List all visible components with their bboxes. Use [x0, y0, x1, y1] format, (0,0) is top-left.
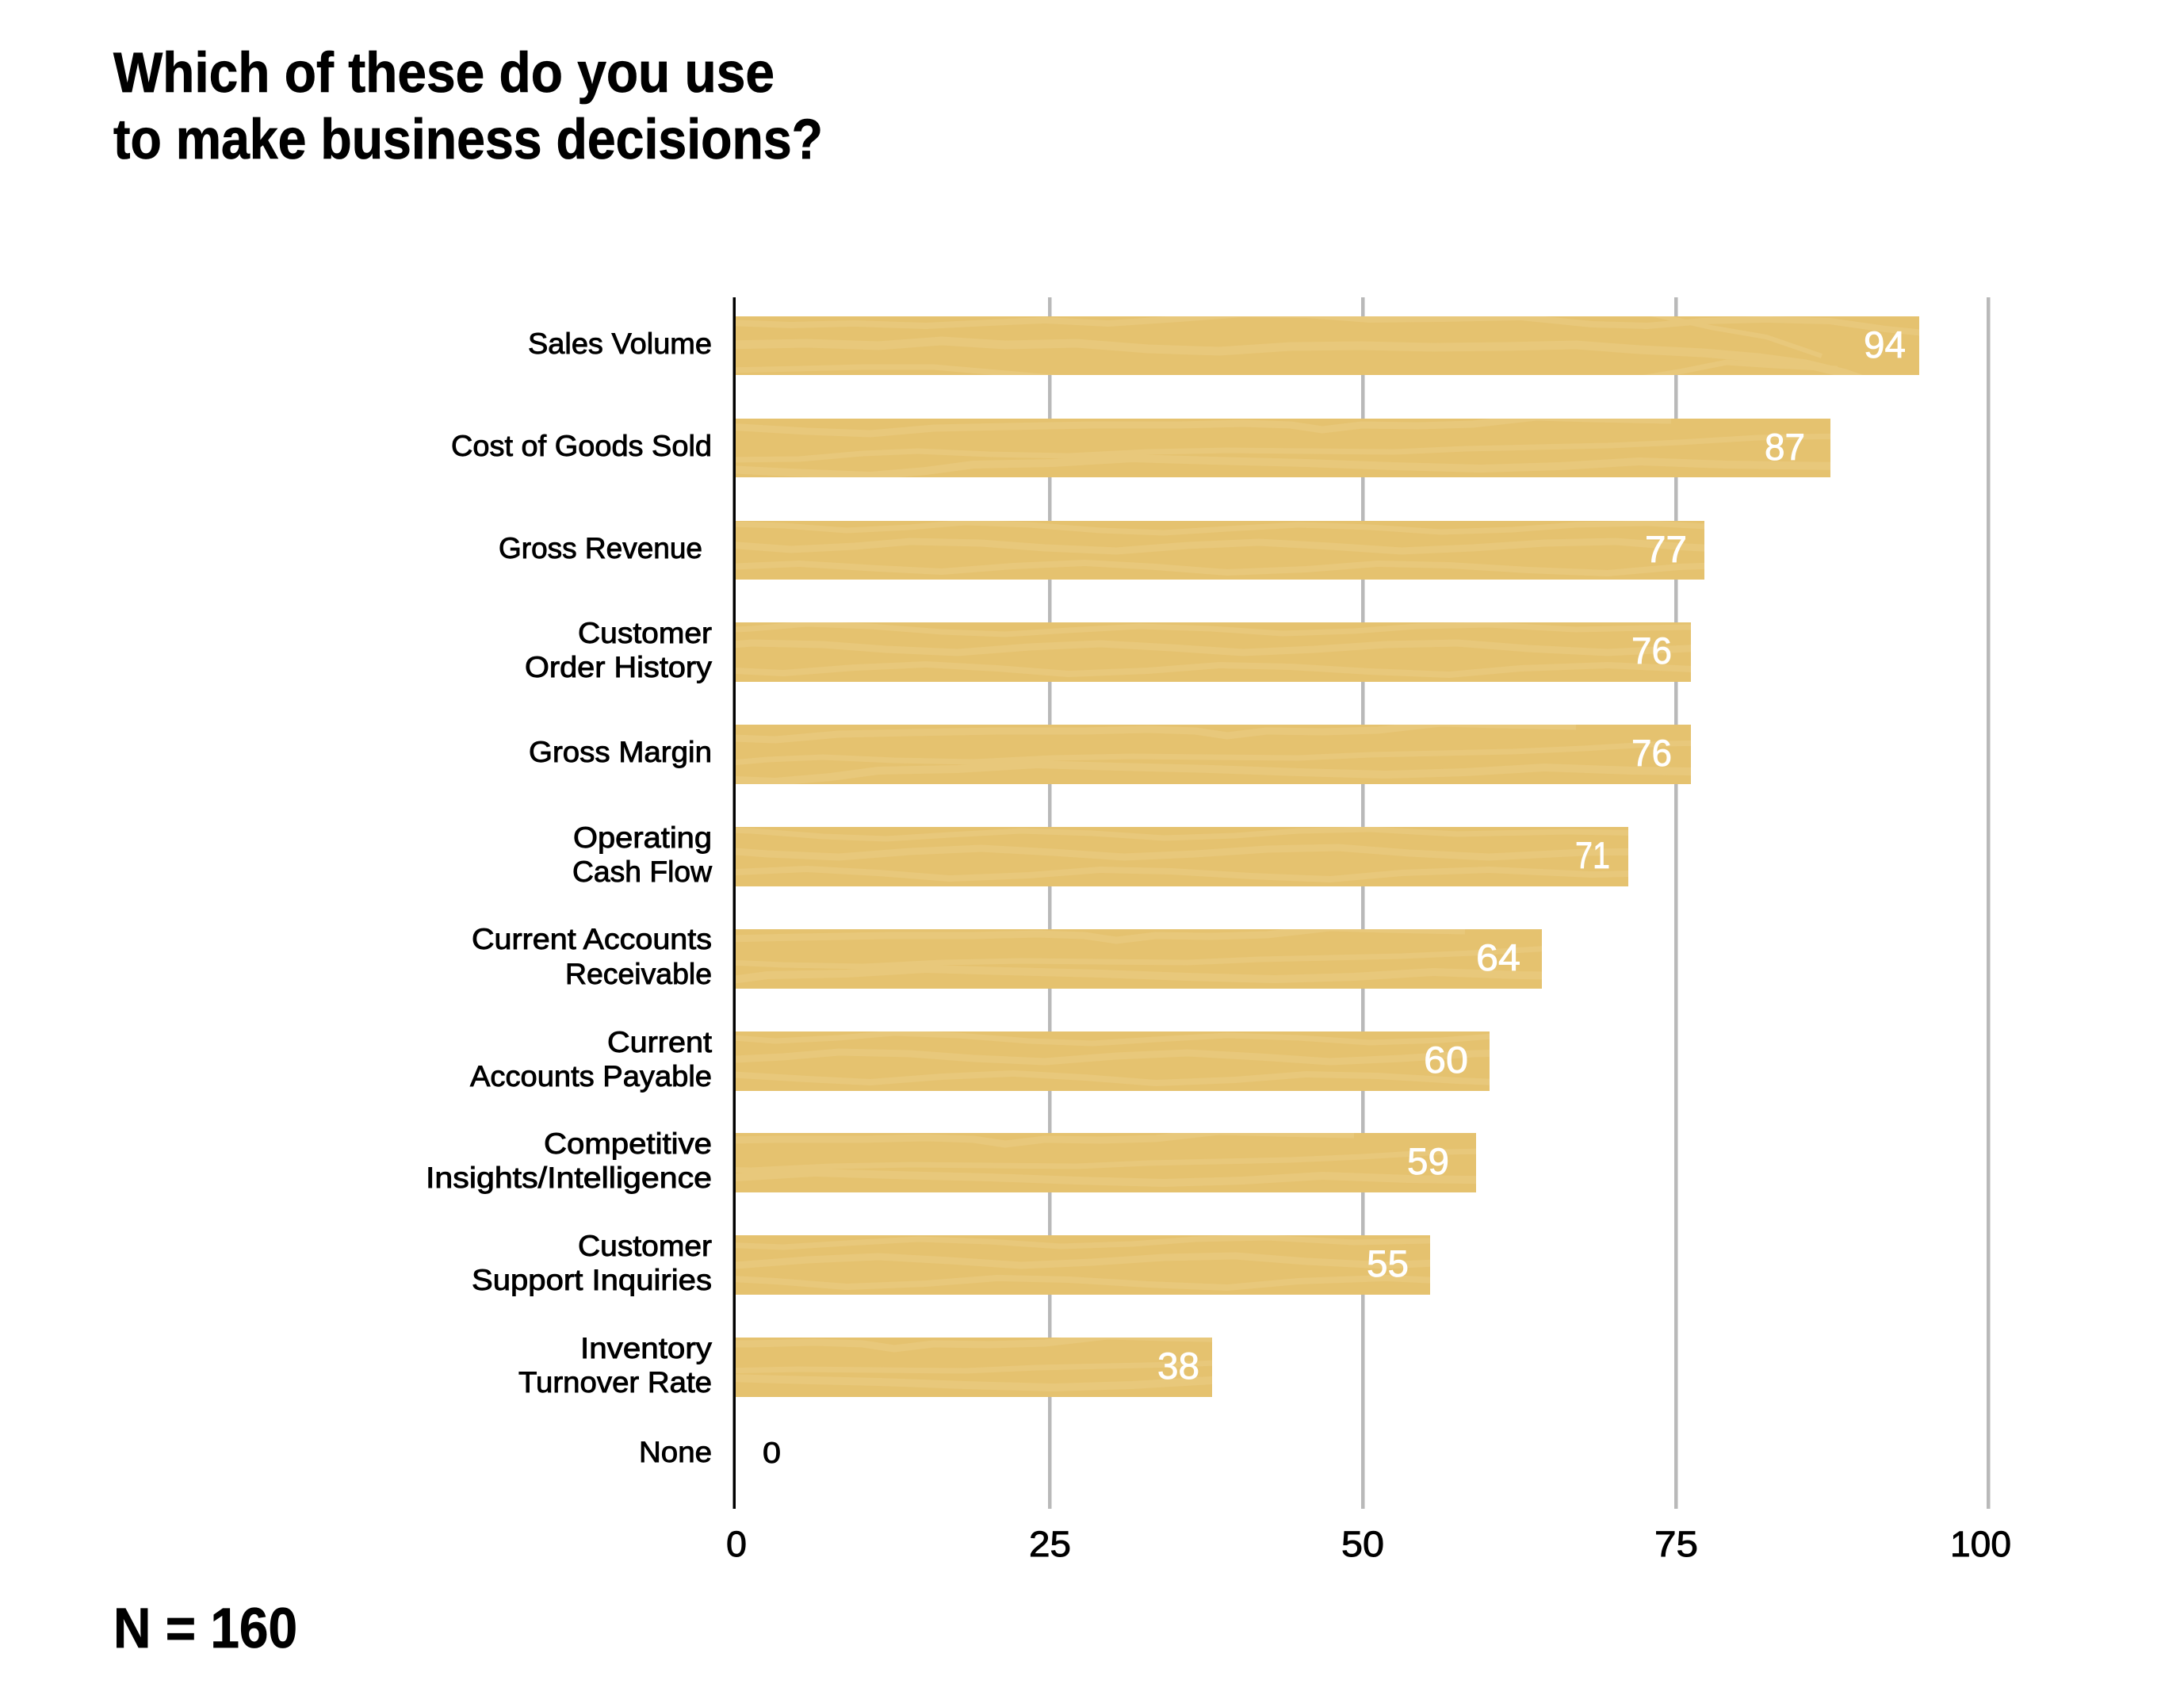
bar: Sales Volume 94: 94 [1864, 323, 1906, 366]
category labels [426, 327, 713, 1468]
category labels: Inventory [580, 1332, 713, 1364]
bar: Gross Revenue 77: 77 [1645, 528, 1687, 570]
category labels: Customer [578, 1230, 712, 1262]
category labels: Insights/Intelligence [426, 1162, 712, 1194]
bar: Gross Margin 76: 76 [1631, 732, 1672, 774]
category labels: Order History [525, 651, 713, 683]
title: to make business decisions? [113, 109, 823, 171]
bar: Sales Volume 94 [728, 313, 2020, 388]
category labels: Gross Margin [529, 736, 712, 768]
title: Which of these do you use [113, 42, 775, 105]
value: None 0: 0 [763, 1437, 781, 1469]
bar: Customer Order History 76: 76 [1631, 630, 1672, 672]
gridlines [1048, 297, 1990, 1509]
bar: Inventory Turnover Rate 38 [300, 1336, 1592, 1397]
bar: Competitive Insights/Intelligence 59: 59 [1407, 1140, 1449, 1182]
x axis tick labels: 100 [1950, 1524, 2011, 1564]
bar: Current Accounts Receivable 64: 64 [1476, 936, 1520, 978]
x axis tick labels: 0 [726, 1524, 747, 1564]
category labels: Cash Flow [572, 855, 712, 888]
x axis tick labels: 50 [1341, 1524, 1384, 1564]
y axis line [732, 297, 736, 1509]
title [113, 42, 823, 171]
category labels: Sales Volume [528, 327, 712, 360]
category labels: None [639, 1436, 712, 1468]
bar: Operating Cash Flow 71 [450, 827, 1742, 886]
category labels: Receivable [565, 958, 712, 990]
bar chart [300, 313, 2020, 1469]
bar: Cost of Goods Sold 87 [728, 417, 2020, 477]
bar: Cost of Goods Sold 87: 87 [1765, 426, 1805, 468]
category labels: Cost of Goods Sold [451, 430, 712, 462]
category labels: Accounts Payable [470, 1060, 712, 1093]
bar: Current Accounts Payable 60: 60 [1424, 1039, 1468, 1081]
bar: Gross Revenue 77 [728, 521, 2020, 580]
bar: Inventory Turnover Rate 38: 38 [1157, 1345, 1199, 1387]
bar: Competitive Insights/Intelligence 59 [411, 1131, 1703, 1192]
bar: Gross Margin 76 [633, 723, 1925, 784]
x axis tick labels: 25 [1029, 1524, 1071, 1564]
bar: Customer Support Inquiries 55: 55 [1367, 1242, 1409, 1284]
x axis tick labels [726, 1524, 2011, 1564]
bar: Current Accounts Payable 60 [656, 1031, 1949, 1091]
sample size note: N = 160 [113, 1598, 297, 1660]
category labels: Competitive [544, 1127, 712, 1160]
category labels: Customer [578, 617, 712, 649]
bar: Operating Cash Flow 71: 71 [1575, 834, 1610, 876]
category labels: Current Accounts [472, 923, 712, 955]
bar: Customer Order History 76 [569, 622, 1861, 682]
bar: Current Accounts Receivable 64 [522, 928, 1814, 989]
category labels: Operating [573, 821, 712, 854]
bar: Customer Support Inquiries 55 [347, 1235, 1639, 1295]
category labels: Turnover Rate [518, 1366, 712, 1399]
category labels: Support Inquiries [472, 1264, 712, 1296]
category labels: Gross Revenue [499, 532, 702, 565]
x axis tick labels: 75 [1654, 1524, 1698, 1564]
category labels: Current [607, 1026, 713, 1058]
